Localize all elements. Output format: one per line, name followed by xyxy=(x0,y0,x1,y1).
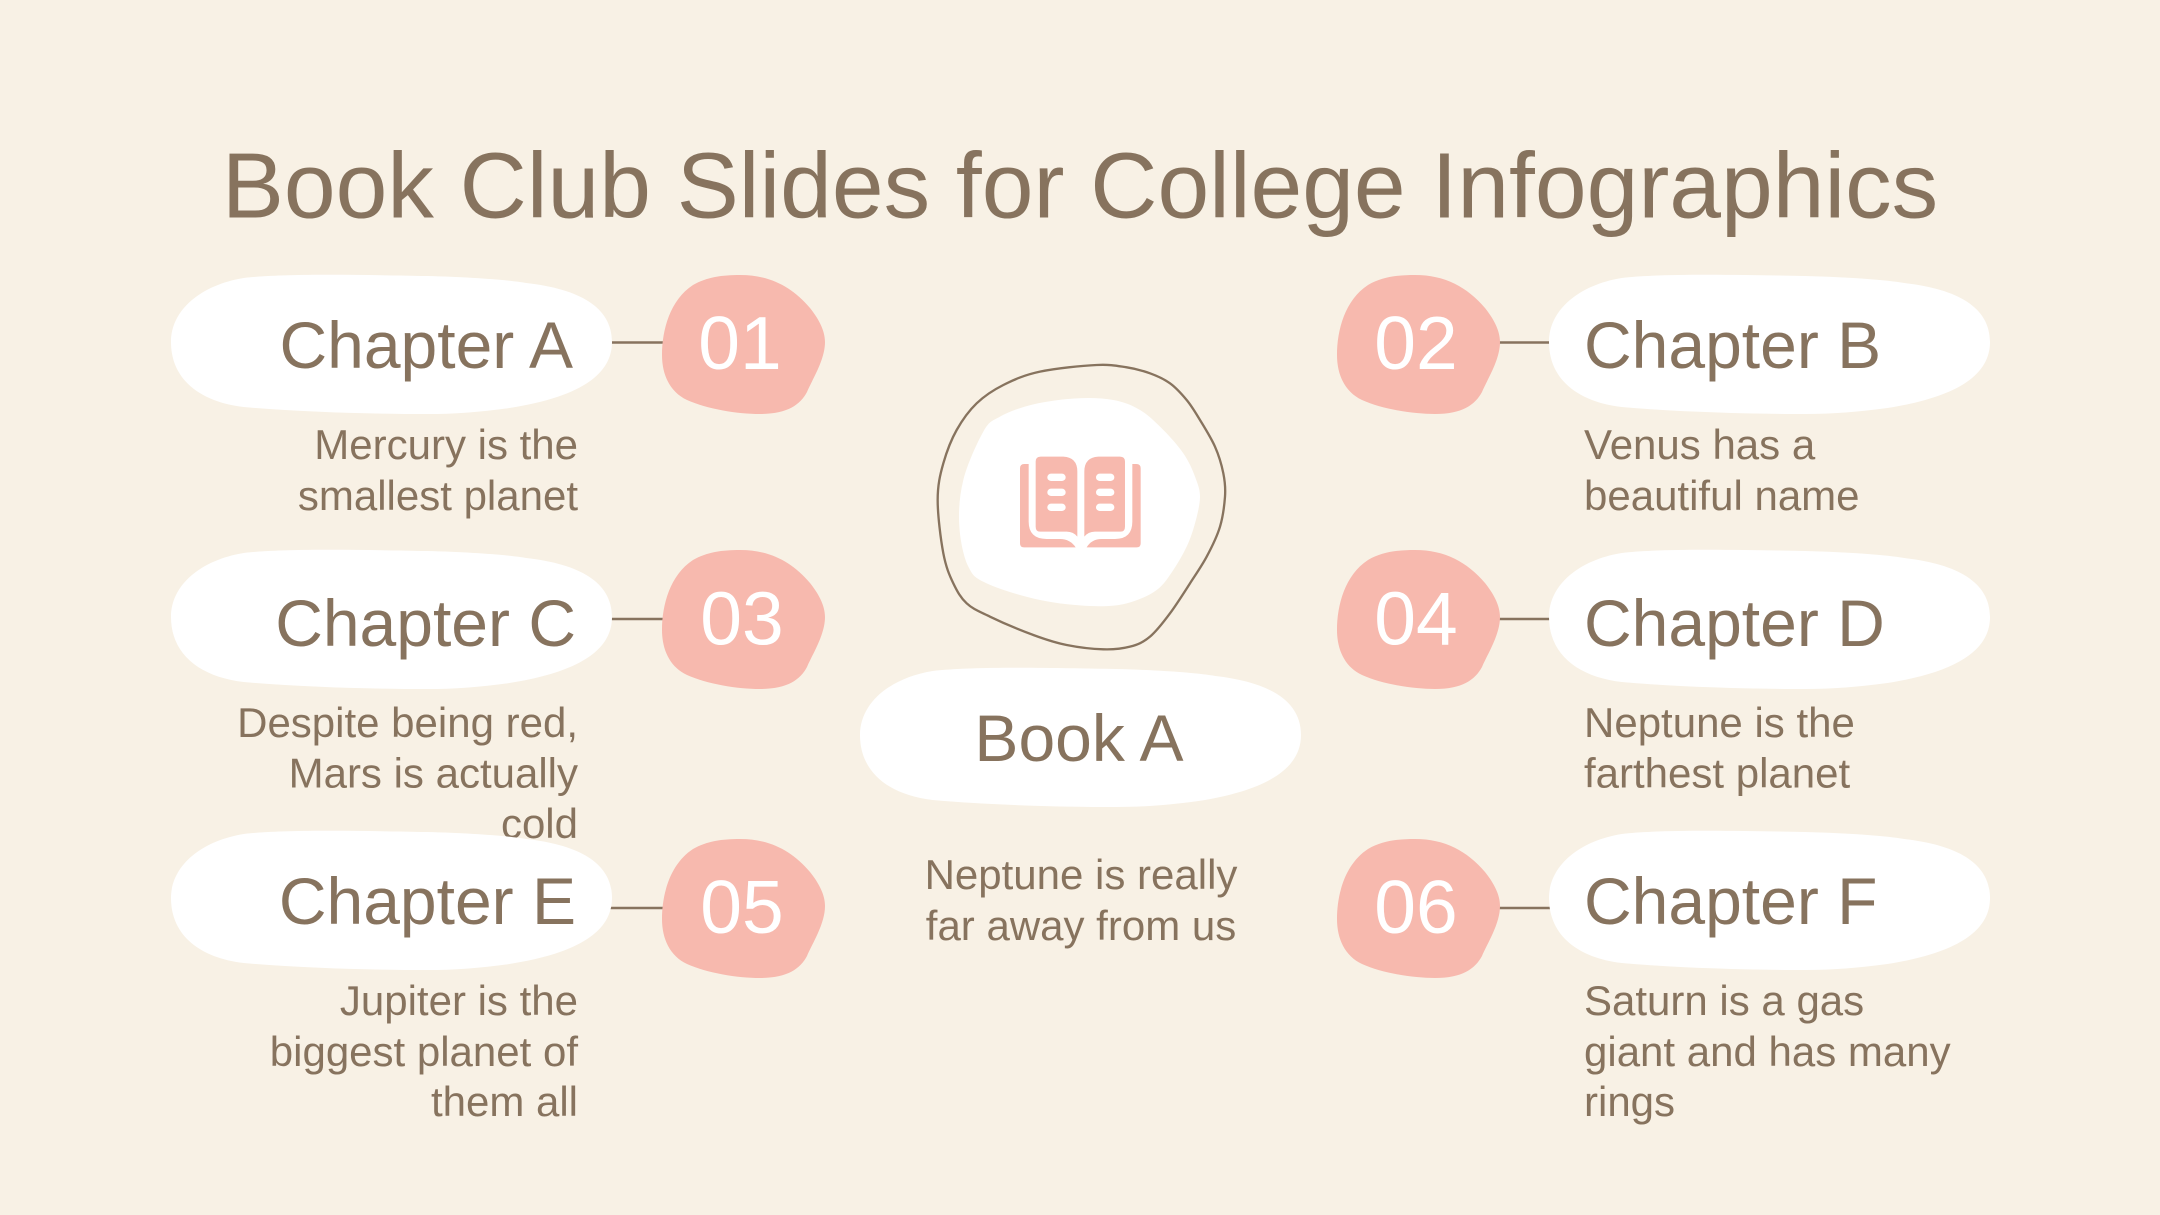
label pill xyxy=(171,550,612,689)
description: giant and has many xyxy=(1584,1028,1951,1075)
connector line xyxy=(1496,907,1552,909)
number blob xyxy=(1337,839,1500,978)
number: 05 xyxy=(700,865,784,949)
label pill xyxy=(171,831,612,970)
label pill xyxy=(1549,550,1990,689)
panel: Chapter A xyxy=(171,275,825,519)
number: 04 xyxy=(1374,576,1458,660)
icon: open book xyxy=(1020,457,1141,547)
number blob xyxy=(1337,550,1500,689)
white blob xyxy=(959,398,1200,606)
panel: Chapter D xyxy=(1337,550,1990,796)
heading: Chapter D xyxy=(1584,586,1885,660)
heading: Chapter A xyxy=(279,308,573,382)
heading: Chapter F xyxy=(1584,864,1877,938)
connector line xyxy=(610,618,664,620)
connector line xyxy=(610,907,664,909)
description: them all xyxy=(431,1078,578,1125)
panel: Chapter F xyxy=(1337,831,1990,1125)
label pill xyxy=(171,275,612,414)
description: farthest planet xyxy=(1584,750,1851,796)
description: Mars is actually xyxy=(289,750,578,796)
description: beautiful name xyxy=(1584,472,1860,519)
panel: Chapter B xyxy=(1337,275,1990,519)
number blob xyxy=(662,275,825,414)
description: Neptune is the xyxy=(1584,699,1855,746)
number: 01 xyxy=(698,301,782,385)
panel: Book A xyxy=(860,365,1301,949)
description: Jupiter is the xyxy=(340,977,578,1024)
description: far away from us xyxy=(926,902,1236,949)
heading: Chapter C xyxy=(275,586,576,660)
heading: Chapter E xyxy=(279,864,576,938)
heading: Book A xyxy=(974,701,1184,775)
description: Mercury is the xyxy=(314,421,578,468)
description: Despite being red, xyxy=(237,699,578,746)
description: Venus has a xyxy=(1584,421,1816,468)
description: cold xyxy=(501,800,578,847)
label pill xyxy=(1549,831,1990,970)
description: rings xyxy=(1584,1078,1675,1125)
heading: Chapter B xyxy=(1584,308,1881,382)
number: 06 xyxy=(1374,865,1458,949)
number: 02 xyxy=(1374,301,1458,385)
title: Book Club Slides for College Infographics xyxy=(222,134,1938,238)
connector line xyxy=(610,341,664,344)
label pill xyxy=(1549,275,1990,414)
number blob xyxy=(662,839,825,978)
panel: Chapter C xyxy=(171,550,825,847)
panel: Chapter E xyxy=(171,831,825,1125)
label pill xyxy=(860,668,1301,807)
description: biggest planet of xyxy=(270,1028,578,1075)
number: 03 xyxy=(700,576,784,660)
outline blob xyxy=(938,365,1225,649)
description: smallest planet xyxy=(298,472,578,519)
number blob xyxy=(1337,275,1500,414)
number blob xyxy=(662,550,825,689)
connector line xyxy=(1496,341,1552,344)
description: Saturn is a gas xyxy=(1584,977,1864,1024)
description: Neptune is really xyxy=(925,851,1237,898)
central emblem xyxy=(938,365,1225,649)
connector line xyxy=(1496,618,1552,620)
